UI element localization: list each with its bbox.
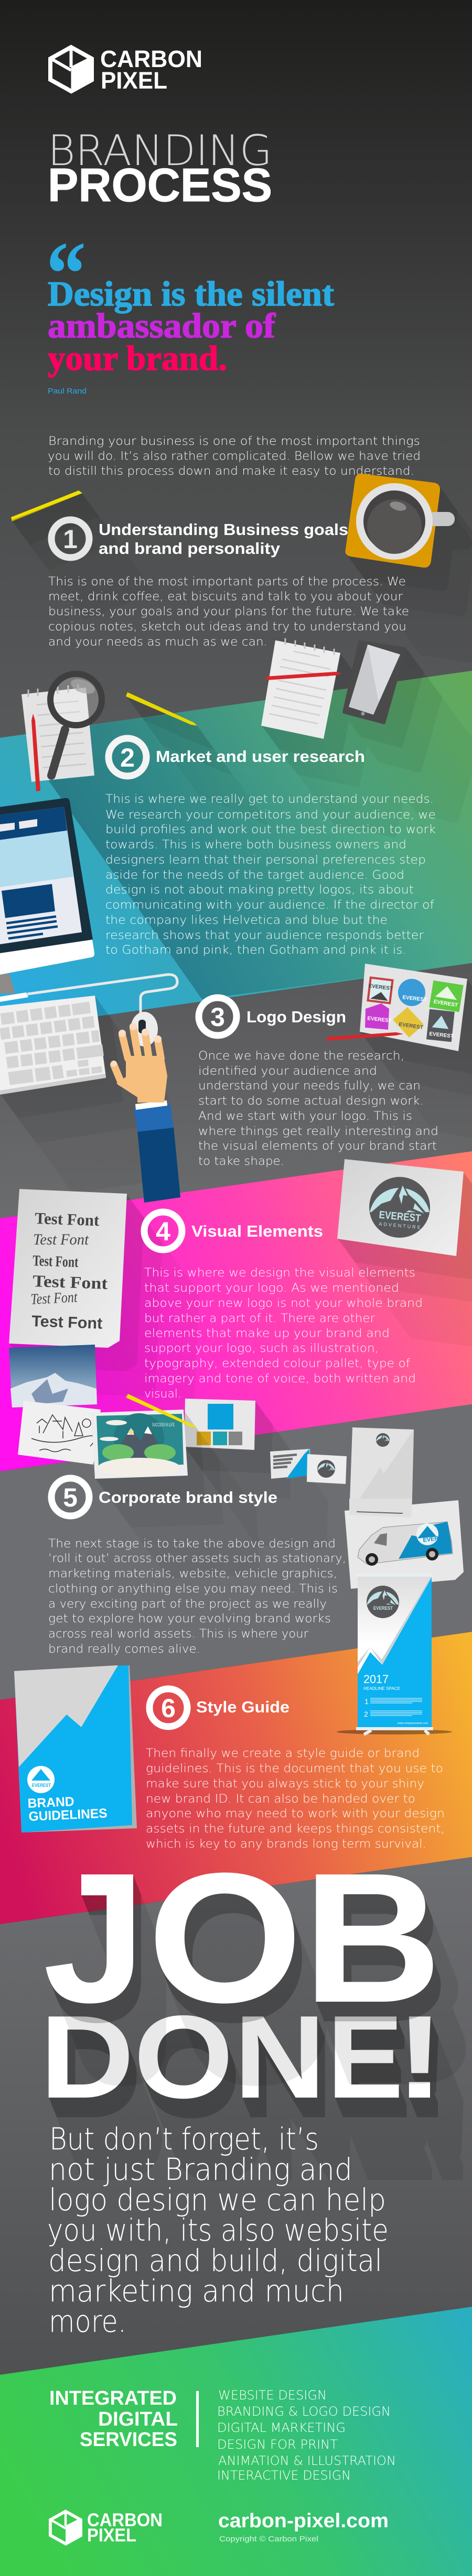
guidelines title: BRAND — [27, 1794, 74, 1811]
services list: INTERACTIVE DESIGN — [217, 2468, 351, 2483]
letterhead bottom — [349, 1499, 412, 1518]
illustration: font specimen sheet: Test Font — [33, 1252, 79, 1271]
badge grey — [426, 1009, 455, 1042]
body text 6: which is key to any brands long term survival. — [146, 1838, 426, 1851]
closing statement: marketing and much — [49, 2273, 344, 2309]
illustration: font specimen sheet: Test Font — [30, 1289, 78, 1308]
body text 4: elements that make up your brand and — [144, 1327, 390, 1340]
illustration: poster — [91, 1410, 188, 1479]
number 5 badge — [51, 1478, 89, 1516]
closing statement: not just Branding and — [49, 2152, 352, 2187]
headline: done: E — [327, 1991, 403, 2123]
headline: job: B — [303, 1834, 442, 2041]
services list — [217, 2388, 396, 2483]
guidelines title — [27, 1794, 108, 1824]
body text 5: across real world assets. This is where your — [48, 1628, 309, 1641]
chin — [0, 940, 94, 975]
integrated digital services heading: INTEGRATED — [49, 2387, 177, 2409]
illustration: roller banner: 2 — [364, 1710, 368, 1718]
number 3 badge — [199, 998, 237, 1035]
card back blue — [286, 1449, 310, 1479]
illustration: yellow pencil two — [126, 692, 197, 726]
body text 5: ‘roll it out’ across other assets such as stationary, — [48, 1552, 346, 1565]
banner panel — [358, 1575, 432, 1727]
integrated digital services heading: SERVICES — [80, 2429, 177, 2451]
headline: done — [40, 1991, 445, 2123]
illustration: van sheet: EVEREST — [423, 1534, 450, 1544]
background: grey band — [0, 963, 472, 1218]
illustration: left notepad and magnifier — [22, 674, 102, 791]
body text 2: research shows that your audience responds better — [105, 929, 424, 942]
body text 2: This is where we really get to understand your needs. — [105, 793, 434, 806]
quote: your brand. — [48, 339, 227, 378]
illustration: roller banner: 1 — [364, 1697, 369, 1706]
guidelines title: GUIDELINES — [28, 1806, 108, 1824]
van livery — [399, 1522, 452, 1559]
letterhead footer line — [357, 1512, 403, 1513]
illustration: business cards — [270, 1449, 347, 1484]
icon: cube — [49, 2510, 82, 2546]
banner copy: 2017 — [363, 1673, 389, 1686]
headline: done: D — [40, 1991, 134, 2123]
body text 6: new brand ID. It can also be handed over to — [146, 1793, 415, 1806]
banner grey edge — [358, 1577, 432, 1667]
illustration: everest logo card: EVEREST — [379, 1209, 421, 1224]
services list: DIGITAL MARKETING — [217, 2420, 346, 2435]
guidelines logo — [27, 1766, 55, 1793]
job long shadow — [43, 1834, 442, 2041]
done long shadow: D — [40, 1991, 134, 2123]
banner body lines — [370, 1698, 422, 1716]
body text 5: clothing or anything else you may need. This is — [48, 1582, 338, 1596]
illustration: brand guidelines book: EVEREST — [32, 1783, 51, 1788]
body text 2: to Gotham and pink, then Gotham and pink it is. — [105, 944, 406, 957]
badge green — [429, 980, 464, 1012]
quote — [48, 275, 335, 378]
background: job done band — [0, 1857, 472, 2375]
body text 2: towards. This is where both business owners and — [105, 838, 406, 852]
body text 4: that support your logo. As we mentioned — [144, 1282, 399, 1295]
heading 1 — [99, 520, 348, 558]
text lines — [6, 916, 58, 938]
body text 2: build profiles and work out the best direction to work — [105, 823, 436, 836]
illustration: font specimen sheet: Test Font — [35, 1209, 100, 1229]
icon: red pencil — [266, 672, 342, 680]
illustration: desktop monitor — [0, 798, 94, 994]
body text 1: This is one of the most important parts of the process. We — [48, 575, 406, 588]
illustration: roller banner: HEADLINE SPACE — [363, 1686, 400, 1691]
badge labels: EVEREST — [367, 1016, 392, 1024]
background: pink band — [0, 1151, 472, 1471]
intro text — [48, 435, 421, 478]
body text 5 — [48, 1537, 346, 1656]
body text 4: This is where we design the visual elements — [144, 1267, 415, 1280]
body text 3: understand your needs fully, we can — [198, 1079, 421, 1093]
illustration: everest logo card: ADVENTURE — [379, 1221, 422, 1230]
banner top bar — [356, 1574, 433, 1577]
headline: job: J — [43, 1834, 146, 2041]
van logo — [416, 1523, 438, 1545]
body text 3: to take shape. — [198, 1155, 284, 1168]
done long shadow: E — [327, 1991, 403, 2123]
cable connector — [0, 992, 28, 1002]
body text 2: designers learn that their personal preferences step — [105, 854, 426, 867]
body text 5: marketing materials, website, vehicle graphics, — [48, 1567, 337, 1580]
number 2 badge: 2 — [120, 743, 135, 772]
body text 3 — [198, 1050, 438, 1168]
job long shadow: J — [43, 1834, 146, 2041]
body text 4: support your logo, such as illustration, — [144, 1342, 379, 1355]
body text 5: get to explore how your evolving brand works — [48, 1612, 331, 1625]
icon: notepad — [22, 684, 94, 782]
closing statement: design and build, digital — [48, 2243, 382, 2278]
body text 1: business, your goals and your plans for the future. We take — [48, 605, 409, 618]
done long shadow — [40, 1991, 445, 2123]
body text 4: typography, extended colour pallet, type of — [144, 1357, 410, 1370]
heading 6: Style Guide — [196, 1698, 289, 1716]
stand — [0, 974, 15, 994]
body text 2: communicating with your audience. If the director of — [105, 899, 434, 912]
illustration: roller banner: EVEREST — [373, 1606, 393, 1611]
illustration: everest logo card — [337, 1159, 464, 1256]
intro text: Branding your business is one of the most important things — [48, 435, 420, 448]
illustration: letterhead — [349, 1427, 414, 1516]
badge labels: EVEREST — [433, 999, 458, 1009]
intro text: to distill this process down and make it easy to understand. — [48, 465, 414, 478]
services list: WEBSITE DESIGN — [218, 2388, 327, 2403]
badge red: EVEREST — [368, 983, 393, 992]
logo: carbon pixel header — [49, 46, 202, 94]
badge yellow — [393, 1007, 424, 1038]
shadow: magnifier and notepad long shadow — [49, 702, 393, 999]
icon: notepad — [261, 638, 340, 739]
done long shadow: ! — [395, 1991, 445, 2123]
badge red — [367, 976, 394, 1005]
body text 4 — [144, 1267, 423, 1401]
body text 3: And we start with your logo. This is — [198, 1110, 412, 1123]
quote attribution: Paul Rand — [48, 387, 87, 396]
illustration: keyboard mouse cable and hand — [0, 975, 180, 1203]
done long shadow: N — [234, 1991, 326, 2123]
body text 3: where things get really interesting and — [198, 1125, 438, 1138]
body text 2 — [105, 793, 436, 957]
keyboard — [0, 996, 106, 1095]
illustration: brand guidelines book — [14, 1665, 137, 1832]
illustration: sketch sheet — [18, 1401, 101, 1465]
number 3 badge: 3 — [210, 1002, 225, 1032]
van mountain — [417, 1526, 436, 1538]
body text 3: identified your audience and — [198, 1065, 377, 1078]
icon: yellow pencil on poster — [126, 1394, 197, 1427]
closing statement: But don’t forget, it’s — [49, 2121, 319, 2157]
background: green footer band — [0, 2307, 472, 2576]
screen hero — [0, 831, 73, 887]
image block — [2, 884, 55, 918]
van body — [358, 1522, 453, 1564]
number 6 badge — [149, 1689, 187, 1727]
logo: carbon pixel footer: PIXEL — [87, 2525, 136, 2546]
heading 2: Market and user research — [156, 747, 365, 766]
closing statement: you with, its also website — [47, 2212, 389, 2248]
logo: carbon pixel footer — [49, 2510, 163, 2546]
body text 5: brand really comes alive. — [48, 1643, 200, 1656]
body text 3: Once we have done the research, — [198, 1050, 404, 1063]
body text 5: a very exciting part of the project as we really — [48, 1598, 327, 1611]
van window — [374, 1533, 387, 1546]
card back — [270, 1449, 310, 1479]
number 2 badge — [109, 738, 146, 776]
background: grey corporate band — [0, 1404, 472, 1700]
done long shadow: O — [134, 1991, 233, 2123]
logo: carbon pixel header: CARBON — [100, 46, 202, 72]
services list: DESIGN FOR PRINT — [217, 2437, 338, 2452]
divider — [196, 2391, 199, 2447]
closing statement: logo design we can help — [49, 2182, 386, 2218]
heading 3: Logo Design — [246, 1008, 346, 1026]
title — [48, 126, 272, 212]
body text 5: The next stage is to take the above design and — [48, 1537, 336, 1551]
body text 4: but rather a part of it. There are other — [144, 1312, 376, 1325]
illustration: poster: SUCCESS IN LIFE — [152, 1422, 175, 1427]
hand — [114, 1028, 167, 1103]
headline: job — [43, 1834, 442, 2041]
body text 3: start to do some actual design work. — [198, 1095, 424, 1108]
arm sleeve cuff — [134, 1105, 174, 1132]
job long shadow: O — [147, 1834, 303, 2041]
heading 4: Visual Elements — [191, 1222, 323, 1240]
headline: done: N — [234, 1991, 326, 2123]
job long shadow: B — [303, 1834, 442, 2041]
badge blue — [398, 979, 425, 1006]
illustration: right notepad phone and pencil — [261, 638, 405, 739]
number 4 badge — [144, 1212, 182, 1250]
arm sleeve dark — [137, 1127, 180, 1203]
closing statement — [47, 2121, 389, 2339]
banner feet — [364, 1730, 429, 1734]
card back lines — [273, 1455, 297, 1468]
body text 6: assets in the future and keeps things consistent, — [146, 1822, 445, 1836]
illustration: font specimen sheet: Test Font — [33, 1231, 89, 1248]
nav button — [0, 823, 15, 832]
badge labels: EVEREST — [429, 1031, 454, 1040]
illustration: colour palette card — [184, 1399, 255, 1450]
title: PROCESS — [48, 159, 272, 212]
illustration: section 1 desk items — [11, 474, 455, 567]
intro text: you will do. It’s also rather complicated. Bellow we have tried — [48, 450, 421, 463]
illustration: font specimen sheet — [9, 1189, 127, 1348]
number 6 badge: 6 — [161, 1694, 176, 1723]
logo: carbon pixel footer: CARBON — [87, 2510, 163, 2530]
badge labels: EVEREST — [399, 1022, 424, 1031]
body text 6: make sure that you always stick to your shiny — [146, 1777, 424, 1791]
number 1 badge: 1 — [63, 525, 78, 554]
icon: red pencil on logo sheet — [327, 1032, 403, 1041]
heading 1: Understanding Business goals — [99, 520, 348, 539]
body text 2: We research your competitors and your audience, we — [105, 809, 436, 822]
body text 4: visual. — [144, 1388, 181, 1401]
banner shadow — [337, 1729, 452, 1734]
services list: BRANDING & LOGO DESIGN — [217, 2404, 391, 2419]
cable — [27, 975, 177, 1017]
card front — [307, 1454, 347, 1484]
mouse — [131, 1012, 158, 1046]
body text 6: anyone who may need to work with your design — [146, 1807, 445, 1820]
illustration: font specimen sheet: Test Font — [31, 1313, 103, 1333]
background: dark top section — [0, 0, 472, 744]
mouse scroll — [138, 1020, 146, 1033]
number 4 badge: 4 — [156, 1217, 170, 1246]
body text 2: aside for the needs of the target audience. Good — [105, 869, 404, 882]
icon: coffee cup on coaster — [345, 474, 455, 567]
screen — [0, 807, 82, 944]
number 5 badge: 5 — [63, 1483, 78, 1512]
body text 4: imagery and tone of voice, both written and — [144, 1372, 416, 1385]
badge labels — [367, 995, 458, 1040]
body text 6: guidelines. This is the document that you use to — [146, 1762, 443, 1775]
body text 6 — [146, 1747, 445, 1851]
illustration: logo variations sheet — [360, 964, 467, 1051]
headline: done: ! — [395, 1991, 445, 2123]
nav button — [19, 819, 37, 829]
background: teal green band — [0, 671, 472, 1030]
van wheels — [366, 1548, 438, 1566]
website address: carbon-pixel.com — [218, 2510, 389, 2532]
heading 5: Corporate brand style — [99, 1488, 277, 1507]
title: BRANDING — [48, 126, 272, 175]
keyboard keys — [0, 1001, 106, 1085]
screen header — [0, 807, 67, 840]
integrated digital services heading — [49, 2387, 178, 2451]
illustration: mountain photo — [9, 1345, 97, 1407]
body text 1: and your needs as much as we can. — [48, 636, 267, 649]
badge labels: EVEREST — [402, 995, 427, 1003]
body text 3: the visual elements of your brand start — [198, 1140, 437, 1153]
fingernails — [111, 1023, 162, 1067]
number 1 badge — [51, 520, 89, 558]
banner logo — [367, 1586, 399, 1618]
icon: yellow pencil — [11, 490, 82, 521]
icon: smartphone — [344, 642, 405, 723]
shirt cuff — [135, 1100, 167, 1110]
quote: Design is the silent — [48, 275, 335, 313]
background: orange band — [0, 1632, 472, 1924]
body text 1 — [48, 575, 409, 649]
headline: done: O — [134, 1991, 233, 2123]
icon: magnifying glass — [50, 674, 102, 776]
body text 2: design is not about making pretty logos, its about — [105, 883, 414, 897]
closing statement: more. — [49, 2304, 126, 2339]
logo: carbon pixel header: PIXEL — [101, 67, 167, 94]
frame — [0, 798, 93, 953]
body text 2: the company likes Helvetica and blue but the — [105, 914, 388, 927]
illustration: roller banner — [337, 1574, 452, 1734]
heading 1: and brand personality — [99, 539, 281, 558]
badge purple — [365, 1003, 389, 1030]
banner blue — [358, 1577, 432, 1727]
icon: cube — [49, 46, 94, 94]
banner base — [356, 1727, 433, 1730]
icon: red pencil — [31, 714, 40, 791]
copyright: Copyright © Carbon Pixel — [219, 2535, 318, 2544]
illustration: van sheet — [345, 1499, 464, 1589]
quote: ambassador of — [48, 307, 276, 345]
headline: job: O — [147, 1834, 303, 2041]
guidelines logo mountain — [31, 1769, 50, 1781]
body text 4: above your new logo is not your whole brand — [144, 1297, 423, 1310]
body text 1: meet, drink coffee, eat biscuits and talk to you about your — [48, 590, 403, 604]
illustration: font specimen sheet: Test Font — [33, 1271, 108, 1293]
services list: ANIMATION & ILLUSTRATION — [218, 2453, 396, 2468]
integrated digital services heading: DIGITAL — [98, 2408, 178, 2430]
illustration: roller banner: www.companyname.com — [398, 1722, 428, 1725]
quote mark: “ — [46, 223, 86, 324]
body text 6: Then finally we create a style guide or brand — [146, 1747, 420, 1760]
body text 1: copious notes, sketch out ideas and try to understand you — [48, 620, 406, 634]
